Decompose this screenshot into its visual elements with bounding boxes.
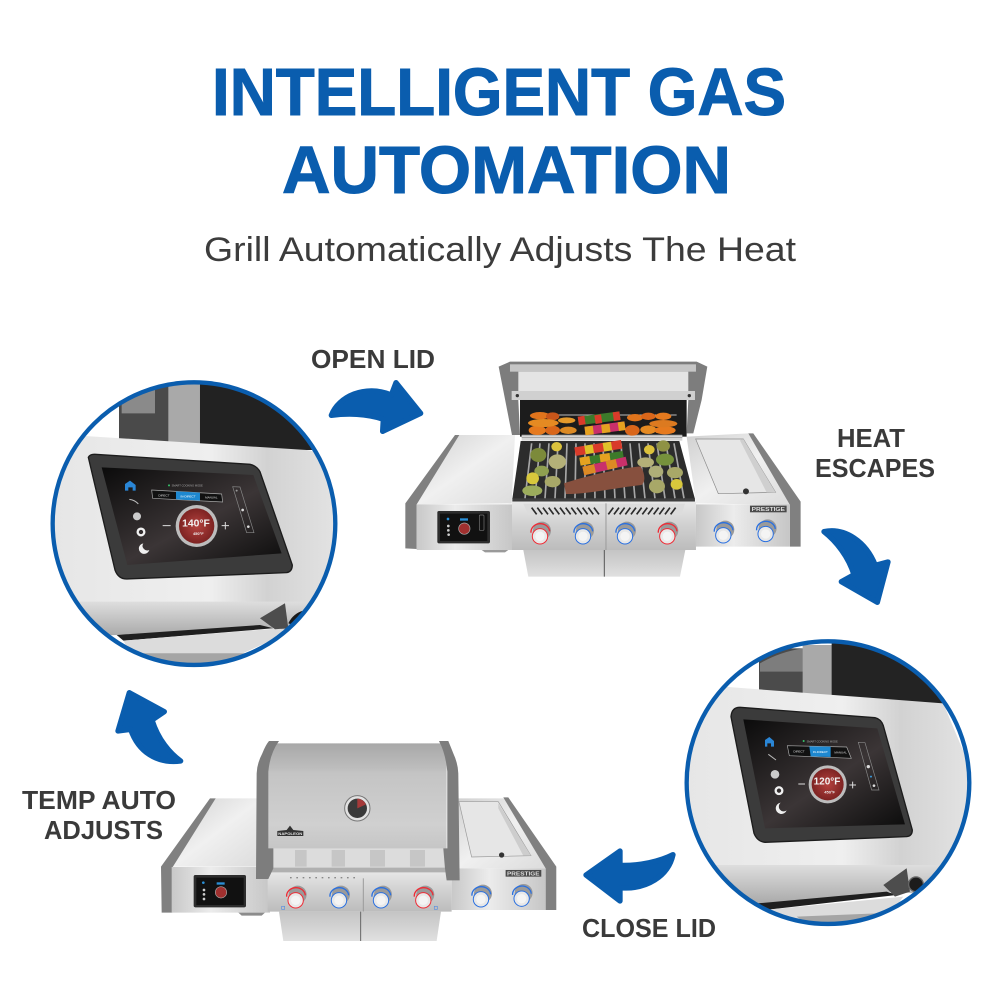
subtitle: Grill Automatically Adjusts The Heat [204,231,797,269]
label: heat escapes [815,423,935,483]
screen display: IN-DIRECT [180,494,196,498]
circle outline [687,641,969,924]
panel: zoomed control screen 140F [50,380,340,670]
left side shelf [405,435,515,552]
control screen [437,511,490,543]
screen display: MANUAL [834,751,847,755]
brand badge [277,826,303,836]
screen bezel [731,707,912,842]
screen display: MANUAL [205,496,218,500]
screen display: SMART COOKING MODE [807,739,838,743]
cart doors [523,550,685,577]
circle outline [53,382,335,665]
label: heat escapes: ESCAPES [815,453,935,483]
label: temp auto adjusts: ADJUSTS [44,815,163,845]
arrow: close lid to temp adjusts [586,851,673,901]
left side shelf [161,798,270,916]
brand badge: NAPOLEON [278,831,302,836]
right side shelf and burner: PRESTIGE [507,871,540,877]
grill body behind the screen [683,643,973,928]
front control panel [268,871,452,912]
title: INTELLIGENT GAS [212,55,786,130]
screen display: SMART COOKING MODE [172,484,203,488]
screen display: 450°F [824,789,836,794]
label: temp auto adjusts [22,785,176,845]
panel: zoomed control screen 120F [683,638,973,928]
label: open lid: OPEN LID [311,344,435,374]
thermometer [345,796,370,821]
control screen [194,875,246,907]
lower grate food [522,440,683,496]
panel: grill with closed lid [161,741,556,941]
title: AUTOMATION [282,133,731,208]
arrow: heat escapes to close lid [824,531,888,602]
label: heat escapes: HEAT [837,423,905,453]
front control panel [512,502,696,550]
closed lid [256,741,460,880]
arrow: open lid to heat escapes [331,383,421,431]
screen display: 140°F [182,519,210,530]
screen display [743,719,905,828]
screen display: DIRECT [793,749,805,753]
right side shelf and burner: PRESTIGE [752,507,786,513]
grill body behind the screen [50,383,340,670]
screen display: IN-DIRECT [813,750,828,754]
screen display [102,467,282,565]
label: temp auto adjusts: TEMP AUTO [22,785,176,815]
lid frame [499,362,707,437]
label: close lid: CLOSE LID [582,913,716,943]
cart doors [279,912,441,941]
upper rack with food [522,412,682,441]
screen bezel [88,454,292,579]
firebox and grates [512,441,695,502]
title [212,55,786,208]
screen display: 120°F [814,777,840,788]
right side shelf and burner [687,433,801,547]
right side shelf and burner [452,797,556,910]
screen display: 450°F [193,531,204,536]
screen display: DIRECT [158,493,170,497]
arrow: temp adjusts to screen [118,693,181,761]
panel: grill with open lid [405,362,801,577]
